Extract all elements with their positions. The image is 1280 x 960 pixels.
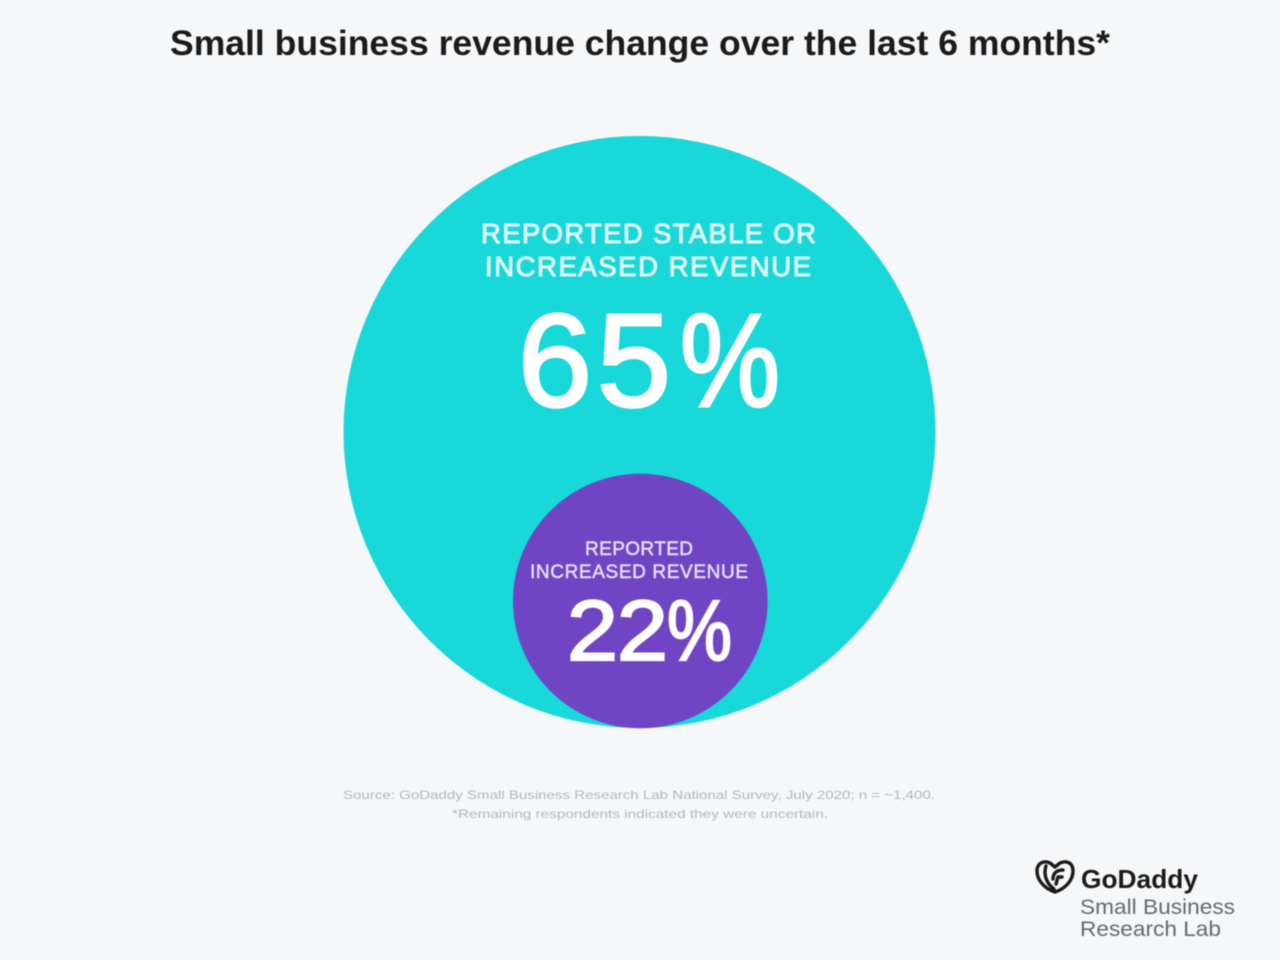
panel: small circle, increased revenue: [513, 474, 768, 728]
source note: *Remaining respondents indicated they were uncertain.: [452, 807, 828, 821]
lab name: [1080, 896, 1235, 941]
label: reported stable or increased revenue: [481, 218, 816, 282]
lab name: Small Business: [1080, 896, 1235, 919]
stat: 22%: %: [667, 584, 732, 679]
wordmark: GoDaddy: [1081, 864, 1199, 894]
stat: 65%: 5: [597, 287, 671, 434]
source note: [343, 788, 935, 821]
stat: 65%: [518, 287, 780, 434]
stat: 22%: 2: [567, 584, 618, 679]
stat: 22%: [567, 584, 732, 679]
lab name: Research Lab: [1080, 918, 1221, 941]
stat: 65%: 6: [518, 287, 592, 434]
stat: 65%: %: [680, 287, 780, 434]
label: reported increased revenue: REPORTED: [585, 539, 693, 560]
stat: 22%: 2: [617, 584, 668, 679]
label: reported increased revenue: INCREASED REVENUE: [530, 562, 748, 583]
label: reported stable or increased revenue: REPORTED STABLE OR: [481, 218, 816, 249]
source note: Source: GoDaddy Small Business Research Lab National Survey, July 2020; n = ~1,400.: [343, 788, 935, 802]
title: Small business revenue change over the last 6 months*: [170, 24, 1110, 63]
panel: large circle, stable or increased revenue: [344, 136, 936, 728]
label: reported stable or increased revenue: INCREASED REVENUE: [485, 251, 811, 282]
label: reported increased revenue: [530, 539, 748, 583]
logo: GoDaddy Small Business Research Lab: [1037, 862, 1235, 941]
icon: GoDaddy heart: [1037, 862, 1073, 892]
